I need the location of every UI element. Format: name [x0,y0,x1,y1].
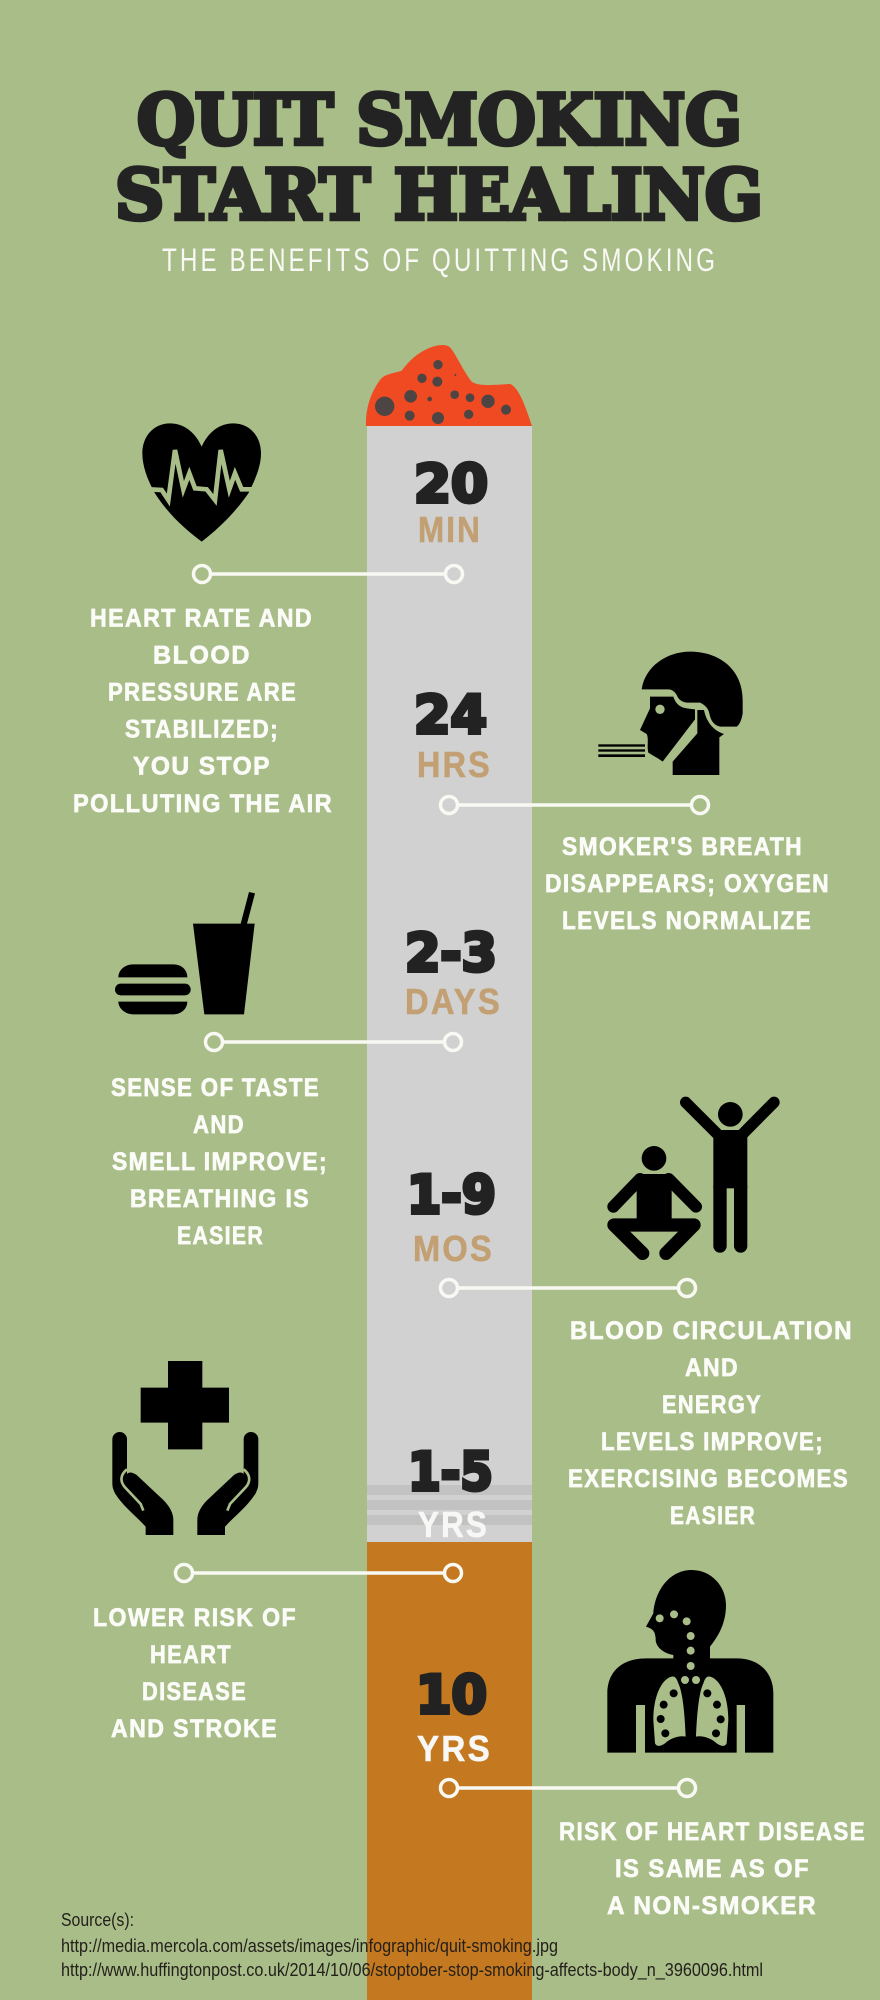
benefit text: DISEASE [142,1678,247,1706]
icon: head exhaling [598,652,743,775]
benefit text [93,1604,297,1743]
benefit text: STABILIZED; [125,716,279,744]
time label: MIN [418,509,482,550]
benefit text [559,1818,866,1920]
time label [408,1442,493,1545]
cigarette [366,345,532,2000]
title: QUIT SMOKING [137,80,742,161]
benefit text: EASIER [670,1502,756,1530]
icon: hands holding cross [112,1361,258,1535]
time label [416,1665,492,1769]
icon: burger and drink [115,892,255,1014]
time label: 10 [416,1665,487,1726]
connector [440,1280,696,1296]
benefit text: IS SAME AS OF [615,1855,810,1883]
cigarette paper [367,426,532,1542]
benefit text [568,1317,853,1530]
time label: 24 [414,685,487,746]
connector [176,1564,462,1582]
connector [206,1034,462,1050]
benefit text: HEART RATE AND [90,604,313,632]
icon: people exercising [613,1102,774,1253]
time label [407,1165,496,1269]
step: 1-9 months [407,1102,853,1530]
benefit text: ENERGY [662,1391,762,1419]
time label: 2-3 [405,923,497,984]
cigarette filter [367,1542,532,2000]
step: 2-3 days [111,892,502,1250]
time label: YRS [418,1504,489,1545]
benefit text: SENSE OF TASTE [111,1074,320,1102]
benefit text: DISAPPEARS; OXYGEN [545,870,830,898]
benefit text: LEVELS NORMALIZE [562,907,812,935]
sources: Source(s): [61,1910,134,1930]
step: 20 minutes [73,423,488,818]
benefit text: AND [685,1354,739,1382]
connector [194,566,462,582]
benefit text: AND [193,1111,245,1139]
icon: body with lungs [607,1570,773,1753]
time label [405,923,502,1022]
time label: MOS [413,1228,494,1269]
time label [414,454,488,550]
burning ember [366,345,532,426]
benefit text: A NON-SMOKER [607,1892,817,1920]
benefit text: LOWER RISK OF [93,1604,297,1632]
step: 24 hours [414,652,830,935]
benefit text: BLOOD [153,642,251,670]
time label: 1-5 [408,1442,493,1503]
benefit text: HEART [150,1641,232,1669]
benefit text: EXERCISING BECOMES [568,1465,849,1493]
subtitle: THE BENEFITS OF QUITTING SMOKING [162,242,718,278]
title [115,80,763,236]
time label: HRS [417,744,492,785]
step: 10 years [416,1570,866,1920]
cigarette stripes [367,1485,532,1525]
benefit text: EASIER [177,1222,264,1250]
time label: 1-9 [407,1165,496,1226]
benefit text [111,1074,328,1250]
time label: 20 [414,454,488,515]
step: 1-5 years [93,1361,493,1743]
benefit text: AND STROKE [111,1715,278,1743]
benefit text: POLLUTING THE AIR [73,790,333,818]
time label: DAYS [405,981,502,1022]
benefit text [545,833,830,935]
benefit text: BLOOD CIRCULATION [570,1317,853,1345]
benefit text: YOU STOP [133,752,271,780]
benefit text: SMOKER'S BREATH [562,833,803,861]
icon: heart with pulse [142,423,261,542]
sources: http://media.mercola.com/assets/images/infographic/quit-smoking.jpg [61,1936,558,1956]
sources: http://www.huffingtonpost.co.uk/2014/10/06/stoptober-stop-smoking-affects-body_n_3960096.html [61,1960,763,1981]
benefit text: LEVELS IMPROVE; [601,1428,824,1456]
connector [440,796,708,814]
benefit text [73,604,333,818]
time label [414,685,492,785]
time label: YRS [417,1728,492,1769]
benefit text: BREATHING IS [130,1185,310,1213]
title: START HEALING [115,155,763,236]
connector [440,1780,696,1796]
benefit text: SMELL IMPROVE; [112,1148,328,1176]
sources [61,1910,763,1981]
benefit text: PRESSURE ARE [108,678,297,706]
